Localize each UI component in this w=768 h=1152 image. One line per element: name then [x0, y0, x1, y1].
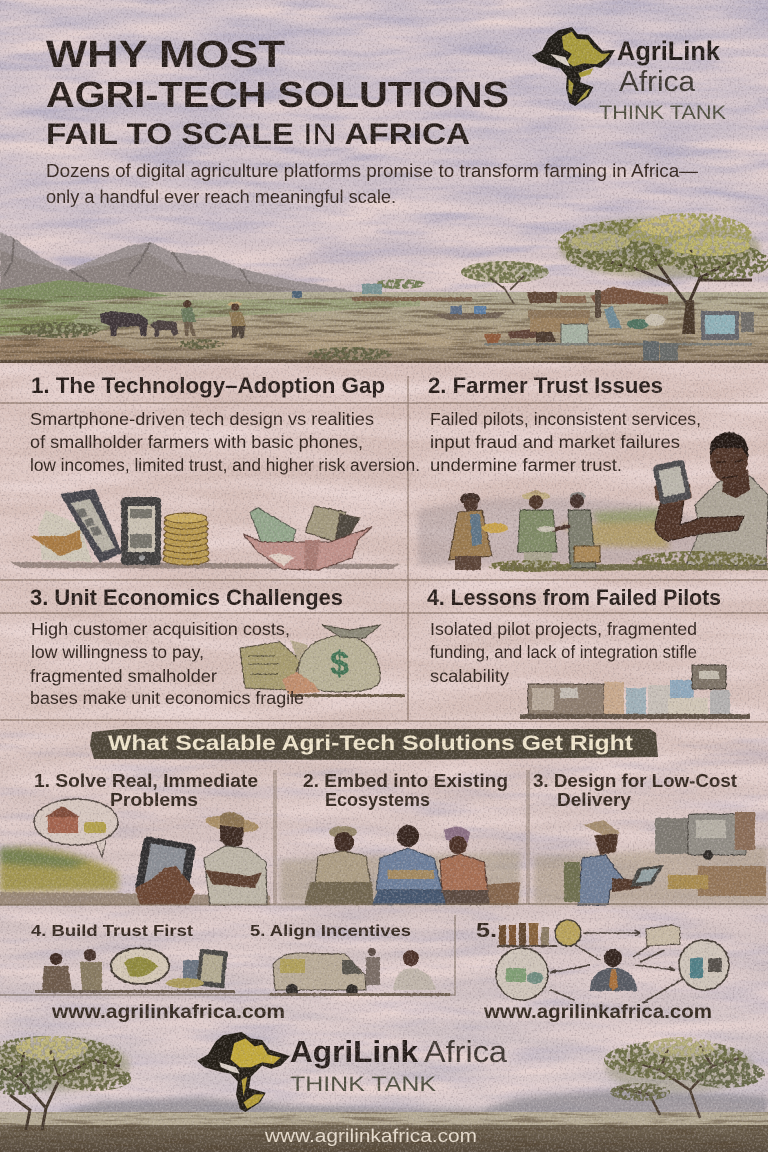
panel 1: technology adoption gap	[10, 373, 420, 570]
item 5: align incentives: 5. Align Incentives	[250, 923, 411, 940]
title	[46, 34, 509, 151]
panel 4: lessons from failed pilots: funding, and lack of integration stifle	[430, 642, 697, 662]
panel 3: unit economics: fragmented smalholder	[30, 666, 217, 686]
logo: AgriLink Africa top	[532, 27, 726, 124]
illustration: farmer with smartphone	[0, 799, 270, 905]
panel 2: farmer trust issues: input fraud and market failures	[430, 432, 680, 452]
panel 1: technology adoption gap: 1. The Technology–Adoption Gap	[31, 373, 385, 398]
oxen	[100, 311, 178, 337]
link: website footer: www.agrilinkafrica.com	[264, 1126, 477, 1146]
item 4: build trust first: 4. Build Trust First	[31, 923, 194, 940]
signs, huts and boat	[292, 284, 668, 320]
illustration: three seated people	[280, 825, 520, 905]
subtitle	[46, 161, 698, 207]
market goods and computer	[484, 306, 754, 361]
panel 4: lessons from failed pilots: 4. Lessons from Failed Pilots	[427, 585, 721, 610]
distant hills	[60, 1090, 768, 1116]
column 2: embed into ecosystems: 2. Embed into Existing	[303, 771, 508, 791]
panel 2: farmer trust issues: 2. Farmer Trust Issues	[428, 373, 663, 398]
item 5b: network diagram: 5.	[476, 920, 497, 942]
icon: money bag and papers	[240, 625, 405, 697]
logo: AgriLink Africa footer	[197, 1032, 508, 1112]
link: website left: www.agrilinkafrica.com	[51, 1002, 285, 1023]
column 3: low cost delivery	[533, 771, 768, 905]
column 1: solve real problems	[0, 771, 270, 905]
column dividers	[275, 770, 528, 904]
businessman	[590, 949, 637, 991]
subtitle: only a handful ever reach meaningful scale.	[46, 187, 396, 207]
ground	[0, 1125, 768, 1152]
mountains	[0, 232, 370, 304]
panel: what works row one	[0, 770, 768, 905]
banner: what scalable solutions get right	[90, 729, 658, 760]
speech bubble	[34, 799, 118, 857]
panel 1: technology adoption gap: low incomes, limited trust, and higher risk aversion.	[30, 455, 420, 475]
panel: what works row two	[0, 915, 729, 1003]
column 2: embed into ecosystems: Ecosystems	[325, 790, 430, 810]
shrubs along ground	[488, 551, 768, 572]
item 5: align incentives	[250, 923, 450, 996]
panel 2: farmer trust issues	[418, 373, 768, 572]
green fields	[0, 280, 480, 362]
ground streaks	[0, 1112, 768, 1152]
panel 2: farmer trust issues: undermine farmer trust.	[430, 455, 622, 475]
icon: Africa map	[532, 27, 615, 106]
item 5b: network diagram	[476, 920, 729, 1003]
subtitle: Dozens of digital agriculture platforms promise to transform farming in Africa—	[46, 161, 698, 181]
panel 4: lessons from failed pilots	[427, 585, 750, 719]
panel 4: lessons from failed pilots: scalability	[430, 666, 509, 686]
panel 1: technology adoption gap: of smallholder farmers with basic phones,	[30, 432, 363, 452]
big acacia tree	[558, 213, 768, 334]
tree left	[0, 1036, 132, 1130]
panel 4: lessons from failed pilots: Isolated pilot projects, fragmented	[430, 619, 697, 639]
footer landscape illustration	[0, 1036, 768, 1152]
sand strip	[0, 1112, 768, 1126]
column 1: solve real problems: 1. Solve Real, Immediate	[34, 771, 258, 791]
column 2: embed into ecosystems	[280, 771, 520, 905]
tree right	[604, 1037, 765, 1118]
banner: what scalable solutions get right: What Scalable Agri-Tech Solutions Get Right	[108, 732, 633, 755]
icon: Africa map	[197, 1032, 290, 1112]
icon: money bag and papers: $	[330, 645, 349, 683]
illustration: agent with tablet and truck	[534, 812, 768, 905]
panel 3: unit economics: bases make unit economics fragile	[30, 688, 304, 708]
column 1: solve real problems: Problems	[110, 790, 198, 810]
link: website right: www.agrilinkafrica.com	[483, 1002, 712, 1023]
panel 2: farmer trust issues: Failed pilots, inconsistent services,	[430, 409, 701, 429]
logo: AgriLink Africa top: Africa	[619, 66, 696, 98]
logo: AgriLink Africa top: AgriLink	[617, 36, 721, 66]
field backdrop	[418, 498, 700, 565]
distant trees	[374, 261, 549, 304]
ground streaks	[0, 296, 768, 362]
illustration: farmers meeting	[418, 432, 768, 572]
panel 3: unit economics: High customer acquisition costs,	[31, 619, 290, 639]
illustration: farmers, crop circle and phones	[35, 948, 235, 993]
panel: challenges grid	[0, 373, 768, 722]
item 4: build trust first	[31, 923, 235, 993]
hero landscape illustration	[0, 213, 768, 363]
title: FAIL TO SCALE IN AFRICA	[46, 118, 470, 151]
column 3: low cost delivery: Delivery	[557, 790, 631, 810]
title: AGRI-TECH SOLUTIONS	[46, 74, 509, 115]
portrait: farmer with phone	[652, 432, 768, 565]
logo: AgriLink Africa footer: Africa	[424, 1034, 508, 1069]
column 3: low cost delivery: 3. Design for Low-Cost	[533, 771, 737, 791]
illustration: delivery van and people	[270, 948, 450, 996]
ground	[0, 292, 768, 362]
panel 1: technology adoption gap: Smartphone-driven tech design vs realities	[30, 409, 374, 429]
logo: AgriLink Africa footer: AgriLink	[290, 1034, 419, 1069]
panel 3: unit economics: 3. Unit Economics Challenges	[30, 585, 343, 610]
illustration: stacked equipment	[520, 665, 750, 719]
logo: AgriLink Africa top: THINK TANK	[599, 103, 726, 124]
arrows	[522, 930, 685, 1003]
logo: AgriLink Africa footer: THINK TANK	[290, 1073, 436, 1096]
illustration: value chain network	[496, 920, 729, 1003]
panel dividers	[0, 376, 768, 722]
panel 3: unit economics	[30, 585, 405, 708]
icon: phones, coins and bowl	[10, 489, 400, 570]
panel 3: unit economics: low willingness to pay,	[31, 642, 204, 662]
farmers in field	[181, 300, 246, 338]
title: WHY MOST	[46, 34, 285, 76]
foreground line	[0, 359, 768, 363]
foreground shrubs	[20, 322, 392, 361]
